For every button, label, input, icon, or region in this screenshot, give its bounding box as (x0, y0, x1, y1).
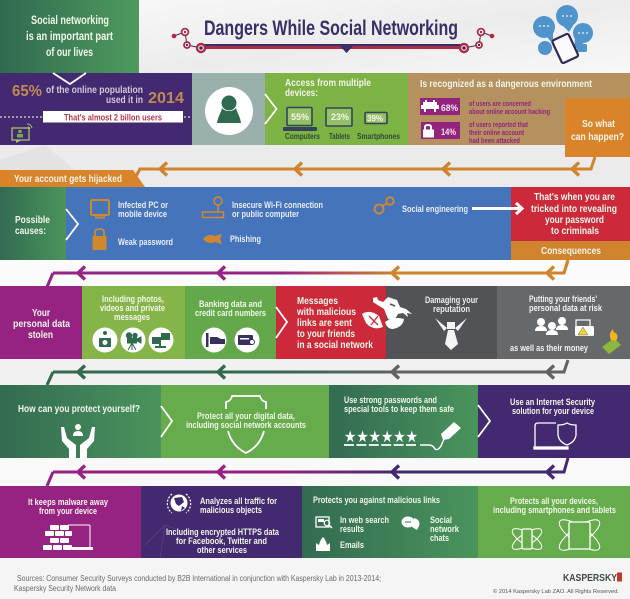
panel: protect digital data: Protect all your digital data, (197, 411, 295, 422)
chart: tablets 23 percent (326, 108, 352, 141)
panel: how to protect (0, 385, 161, 458)
panel: possible causes heading (0, 187, 66, 260)
cause: social engineering: Social engineering (402, 204, 468, 215)
stat text: hacking: of users are concerned (469, 99, 531, 108)
stat: 14 percent (421, 122, 460, 139)
panel: malicious links (276, 286, 386, 359)
panel: strong passwords: Use strong passwords and (344, 395, 437, 406)
stat: 65 percent: 65% (12, 83, 42, 100)
panel: possible causes heading: causes: (15, 226, 46, 237)
panel: tricked: your password (545, 214, 604, 226)
panel: damaging reputation (386, 286, 497, 359)
panel: strong passwords (329, 385, 478, 458)
panel: banking data: Banking data and (199, 299, 262, 310)
icon: camera (92, 328, 118, 352)
arrow: white chevron (265, 94, 276, 124)
callout: so what can happen (565, 98, 630, 157)
panel: damaging reputation: Damaging your (425, 295, 478, 306)
icon: monster (362, 297, 412, 329)
title: Dangers While Social Networking (204, 17, 458, 40)
stat: 68 percent (420, 98, 460, 115)
panel: intro: is an important part (26, 31, 113, 43)
panel: internet security (478, 385, 630, 458)
panel: protect digital data (161, 385, 329, 458)
icon: messages (148, 328, 174, 352)
panel: friends data: Putting your friends' (529, 294, 597, 305)
callout: so what can happen: So what (582, 118, 615, 130)
cause: phishing: Phishing (230, 234, 261, 245)
panel: damaging reputation: reputation (433, 304, 470, 315)
panel: intro (0, 0, 139, 73)
panel: how to protect: How can you protect yourself? (18, 403, 140, 415)
panel: photos and videos: videos and private (100, 303, 165, 314)
label: consequences: Consequences (541, 246, 601, 257)
heading: access (285, 78, 371, 99)
panel: multiple devices (265, 73, 408, 145)
panel: personal data stolen (0, 286, 82, 359)
panel: malicious links protection: In web search (340, 515, 389, 526)
icon: hands and person (61, 424, 95, 458)
label: consequences (511, 241, 630, 260)
icon: chat bubbles (402, 516, 419, 530)
panel: protect digital data: including social network accounts (186, 420, 306, 431)
panel: malicious links protection: results (340, 524, 364, 535)
text: online population: used it in (106, 95, 143, 106)
cause: insecure wifi: or public computer (232, 209, 299, 220)
panel: malicious links protection: Protects you against malicious links (313, 495, 440, 506)
heading: access: devices: (285, 88, 318, 99)
cause: insecure wifi (232, 200, 323, 220)
arrow: row 4 (47, 458, 568, 486)
cause: infected device (118, 200, 168, 220)
icon: globe (167, 494, 191, 513)
footer: sources: Kaspersky Security Network data (14, 584, 116, 593)
panel: personal data stolen: Your (32, 307, 50, 319)
panel: intro: of our lives (46, 47, 93, 59)
cause: infected device: mobile device (118, 209, 167, 220)
panel: analyzes traffic: other services (197, 545, 247, 556)
panel: malicious links: in a social network (297, 339, 373, 351)
icon: connected people (374, 197, 394, 214)
panel: possible causes heading: Possible (15, 215, 50, 226)
arrow: row 1 orange (135, 157, 595, 178)
cause: infected device: Infected PC or (118, 200, 168, 211)
icon: password stars: ★★★★★★ (344, 427, 418, 446)
panel: person icon (192, 73, 265, 145)
panel: possible causes (66, 187, 511, 260)
icon: person with heart (217, 96, 241, 123)
panel: analyzes traffic: Analyzes all traffic for (200, 496, 277, 507)
arrow: white chevron (276, 307, 287, 338)
icon: shield outline (226, 396, 266, 453)
panel: malicious links: links are sent (297, 317, 352, 329)
icon: web search (316, 517, 332, 528)
panel: strong passwords: special tools to keep them safe (344, 404, 454, 415)
cause: insecure wifi: Insecure Wi-Fi connection (232, 200, 323, 211)
panel: malicious links protection (302, 486, 478, 558)
panel: banking data (185, 286, 276, 359)
icon: monitor user (12, 124, 32, 143)
stat text: attacked (469, 120, 528, 145)
panel: internet security: solution for your device (512, 406, 594, 417)
icon: printer warning (575, 320, 594, 336)
stat: 14 percent: 14% (441, 127, 456, 137)
stat text: attacked: their online account (469, 128, 524, 137)
panel: malicious links protection: Social (430, 515, 452, 526)
stat text: hacking (469, 99, 550, 116)
icon: pen (420, 422, 461, 450)
chart: computers 55 percent: 55% (291, 112, 310, 123)
panel: friends data (497, 286, 630, 359)
panel: friends data: personal data at risk (529, 303, 603, 314)
panel: dangerous environment (408, 73, 630, 145)
chart: tablets 23 percent: Tablets (329, 132, 350, 141)
panel: personal data stolen: personal data (13, 318, 70, 330)
arrow: row 2 (47, 260, 568, 287)
panel: online population (0, 73, 192, 145)
label: account hijacked: Your account gets hijacked (14, 173, 122, 185)
icon: email fire (316, 537, 330, 551)
panel: malicious links: Messages (297, 295, 338, 307)
title (172, 17, 494, 53)
icon: people (535, 317, 568, 335)
panel: photos and videos: Including photos, (102, 294, 164, 305)
icon: brick wall laptop (43, 525, 93, 550)
icon: monitor (91, 200, 109, 218)
arrow: white notch (53, 73, 86, 84)
arrow: white chevron (66, 209, 78, 240)
text: online population: of the online population (46, 85, 143, 96)
label: account hijacked (0, 170, 145, 187)
footer: sources: Sources: Consumer Security Surveys conducted by B2B International in conjunction with Kaspersky Lab in 2013-2014; (17, 574, 381, 583)
stat text: hacking: about online account hacking (469, 107, 550, 116)
chart: tablets 23 percent: 23% (331, 112, 350, 123)
chart: smartphones 39 percent (357, 112, 400, 141)
stat text: attacked: had been attacked (469, 136, 520, 145)
chart: smartphones 39 percent: Smartphones (357, 132, 400, 141)
panel: analyzes traffic: malicious objects (200, 505, 262, 516)
icon: fish (203, 234, 222, 244)
panel: banking data: credit card numbers (195, 308, 266, 319)
panel: analyzes traffic: for Facebook, Twitter and (176, 536, 267, 547)
panel: keeps malware away: from your device (39, 506, 97, 517)
panel: analyzes traffic (141, 486, 302, 558)
footer: sources (14, 574, 381, 593)
icon: burning money (602, 329, 621, 354)
panel: malicious links: with malicious (296, 306, 356, 318)
stat text: attacked: of users reported that (469, 120, 528, 129)
heading: access: Access from multiple (285, 78, 371, 89)
panel: personal data stolen: stolen (28, 329, 53, 341)
panel: malicious links protection: Emails (340, 540, 364, 551)
chart: computers 55 percent (283, 108, 320, 141)
icon: smartphone orbit (509, 525, 545, 553)
heading: Is recognized as a dangerous environment (420, 79, 593, 90)
panel: malicious links protection: network (430, 524, 460, 535)
footer: copyright: © 2014 Kaspersky Lab ZAO. All Rights Reserved. (493, 588, 619, 595)
panel: photos and videos (82, 286, 185, 359)
panel: intro: Social networking (31, 15, 109, 27)
arrow: white pointing to red panel (472, 203, 522, 214)
icon: video camera (120, 328, 146, 352)
panel: protects all devices: Protects all your devices, (510, 496, 598, 507)
panel: tricked: to criminals (551, 225, 599, 237)
icon: bank card (202, 328, 226, 352)
chart: computers 55 percent: Computers (285, 132, 320, 141)
panel: photos and videos: messages (114, 312, 150, 323)
arrow: white chevron (161, 406, 172, 437)
panel: protects all devices (478, 486, 630, 558)
panel: internet security: Use an Internet Security (510, 397, 596, 408)
stat: 68 percent: 68% (441, 103, 458, 113)
panel: keeps malware away: It keeps malware away (28, 497, 109, 508)
stat: 2014: 2014 (148, 90, 184, 107)
icon: chat bubbles and phone (533, 5, 593, 64)
callout: 2 billion users: That's almost 2 billon users (64, 112, 162, 124)
text: online population (46, 85, 143, 106)
icon: open lock (92, 229, 106, 250)
panel: analyzes traffic: Including encrypted HTTPS data (166, 527, 280, 538)
panel: keeps malware away (0, 486, 141, 558)
cause: weak password: Weak password (118, 237, 173, 248)
panel: malicious links: to your friends (297, 328, 355, 340)
arrow: row 3 (47, 360, 568, 385)
logo: Kaspersky: KASPERSKY (563, 572, 617, 584)
panel: tricked (511, 187, 630, 241)
panel: friends data: as well as their money (510, 343, 589, 354)
arrow: white chevron (478, 405, 490, 437)
icon: router (202, 197, 224, 218)
icon: torn tie (435, 318, 467, 350)
icon: laptop and shield (534, 423, 576, 449)
icon: credit card search (234, 328, 260, 352)
icon: tablet orbit (555, 515, 604, 555)
panel: malicious links protection: chats (430, 533, 449, 544)
chart: smartphones 39 percent: 39% (367, 114, 383, 124)
